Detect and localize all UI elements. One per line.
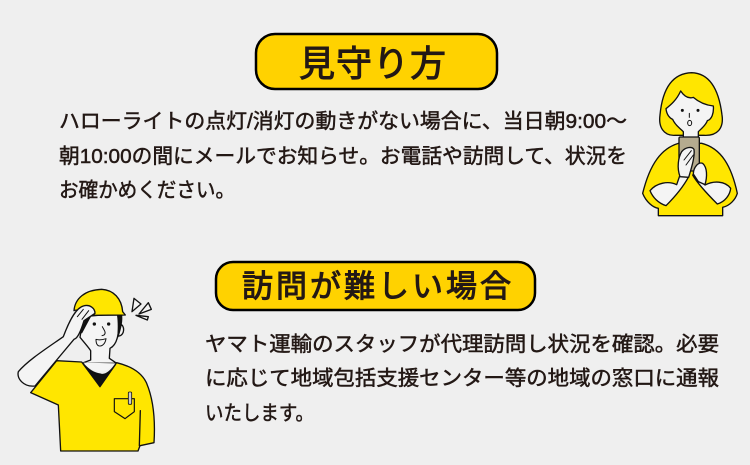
text block: monitoring description: 朝10:00の間にメールでお知らせ。お電話や訪問して、状況を: [59, 145, 627, 168]
heading: 見守り方: 見守り方: [299, 43, 446, 84]
text block: when visit is difficult: に応じて地域包括支援センター等の地域の窓口に通報: [205, 367, 719, 390]
text block: monitoring description: お確かめください。: [59, 179, 235, 202]
heading: 訪問が難しい場合: [216, 262, 535, 310]
text block: when visit is difficult: ヤマト運輸のスタッフが代理訪問し状況を確認。必要: [205, 333, 719, 356]
heading: 訪問が難しい場合: 訪問が難しい場合: [242, 269, 511, 304]
text block: monitoring description: [59, 110, 627, 202]
icon: woman holding smartphone: [643, 73, 737, 216]
text block: monitoring description: ハローライトの点灯/消灯の動きがない場合に、当日朝9:00〜: [59, 110, 627, 133]
text block: when visit is difficult: いたします。: [205, 402, 314, 425]
text block: when visit is difficult: [205, 333, 719, 425]
heading: 見守り方: [256, 34, 497, 89]
icon: staff man in yellow cap and shirt: [18, 289, 154, 451]
